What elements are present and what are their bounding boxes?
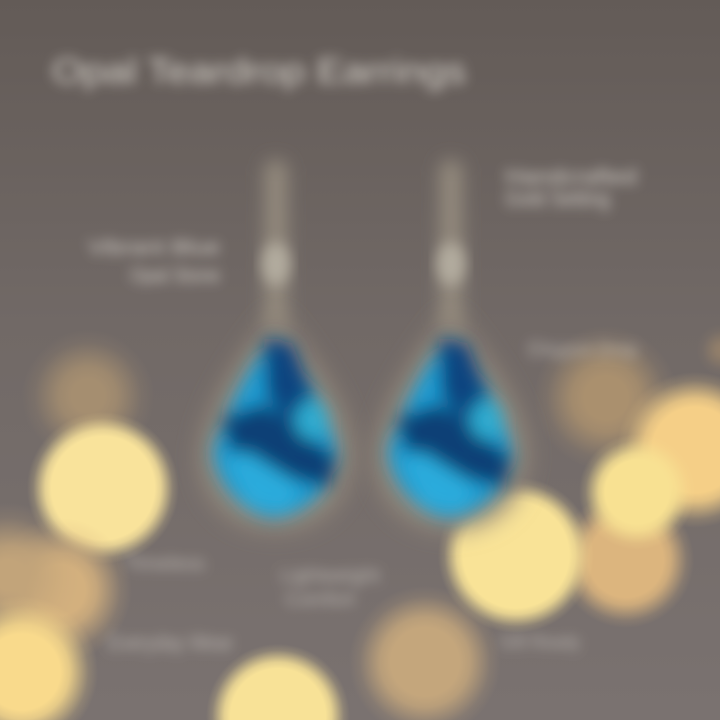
callout: lower labels — [108, 553, 580, 655]
ear wire — [265, 160, 287, 330]
bead — [437, 242, 465, 286]
bead — [262, 242, 290, 286]
callout: left — [88, 237, 220, 287]
gem — [388, 338, 513, 518]
callout: lower labels: Everyday Wear — [108, 630, 233, 655]
callout: top right: Handcrafted — [505, 164, 637, 189]
right earring — [375, 160, 527, 530]
callout: lower labels: Timeless — [125, 553, 205, 575]
callout: top right: Gold Setting — [505, 186, 610, 211]
callout: lower labels: Lightweight — [280, 565, 380, 587]
callout: lower labels: Gift Ready — [500, 632, 580, 652]
title: Opal Teardrop Earrings — [52, 52, 466, 91]
callout: left: Vibrant Blue — [88, 237, 220, 259]
callout: left: Opal Stone — [130, 265, 220, 287]
callout: top right — [505, 164, 637, 211]
gold halo — [200, 314, 352, 530]
callout: right middle: Elegant Drop — [528, 339, 638, 361]
bokeh lights — [0, 324, 720, 720]
ear wire — [440, 160, 462, 330]
left earring — [200, 160, 352, 530]
callout: lower labels: Comfort — [285, 589, 355, 611]
gold halo — [375, 314, 527, 530]
gem — [213, 338, 338, 518]
